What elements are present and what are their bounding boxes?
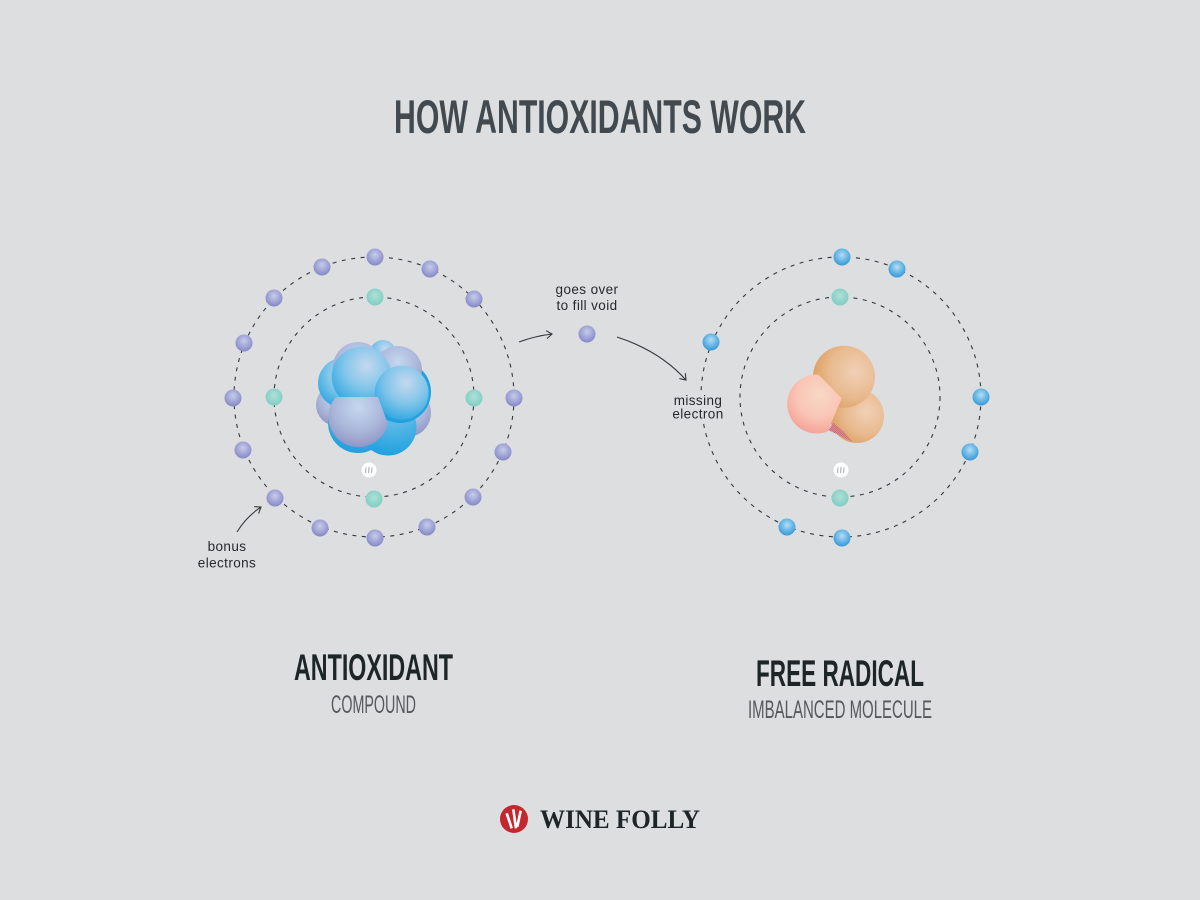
inner electron orbit — [740, 297, 940, 497]
outer electron orbit — [701, 257, 981, 537]
label: bonus electrons: electrons — [198, 556, 256, 570]
outer purple electrons — [224, 248, 522, 546]
heading: antioxidant compound: ANTIOXIDANT — [294, 647, 453, 688]
antioxidant nucleus — [316, 340, 431, 456]
heading: free radical imbalanced molecule — [748, 653, 932, 724]
label: missing electron: electron — [672, 406, 724, 422]
label: bonus electrons: bonus — [208, 539, 246, 554]
icon: red circle with bottles — [500, 805, 528, 833]
outer blue electrons — [702, 248, 990, 546]
label: goes over to fill void — [556, 282, 619, 313]
label: missing electron: missing — [674, 393, 722, 408]
arrow: electron to free radical — [617, 337, 686, 380]
inner teal electrons — [266, 288, 482, 508]
antioxidant atom diagram — [224, 248, 522, 546]
arrow: bonus electrons — [237, 507, 261, 532]
outer electron orbit — [234, 257, 514, 537]
arrow: antioxidant to electron — [519, 334, 552, 342]
small logo mark — [834, 462, 848, 478]
label: goes over to fill void: goes over — [556, 282, 619, 297]
title: HOW ANTIOXIDANTS WORK — [394, 90, 806, 143]
small logo mark — [362, 462, 376, 478]
free radical nucleus — [787, 346, 884, 443]
inner teal electrons — [832, 288, 848, 506]
transferring electron — [578, 326, 596, 342]
label: missing electron — [668, 391, 730, 423]
inner electron orbit — [274, 297, 474, 497]
heading: antioxidant compound — [294, 647, 453, 719]
heading: antioxidant compound: COMPOUND — [331, 691, 416, 719]
heading: free radical imbalanced molecule: FREE RADICAL — [756, 653, 924, 694]
logo: Wine Folly: WINE FOLLY — [540, 805, 700, 834]
label: goes over to fill void: to fill void — [556, 298, 618, 313]
free radical atom diagram — [701, 248, 990, 546]
label: bonus electrons — [198, 539, 256, 570]
heading: free radical imbalanced molecule: IMBALANCED MOLECULE — [748, 696, 932, 724]
